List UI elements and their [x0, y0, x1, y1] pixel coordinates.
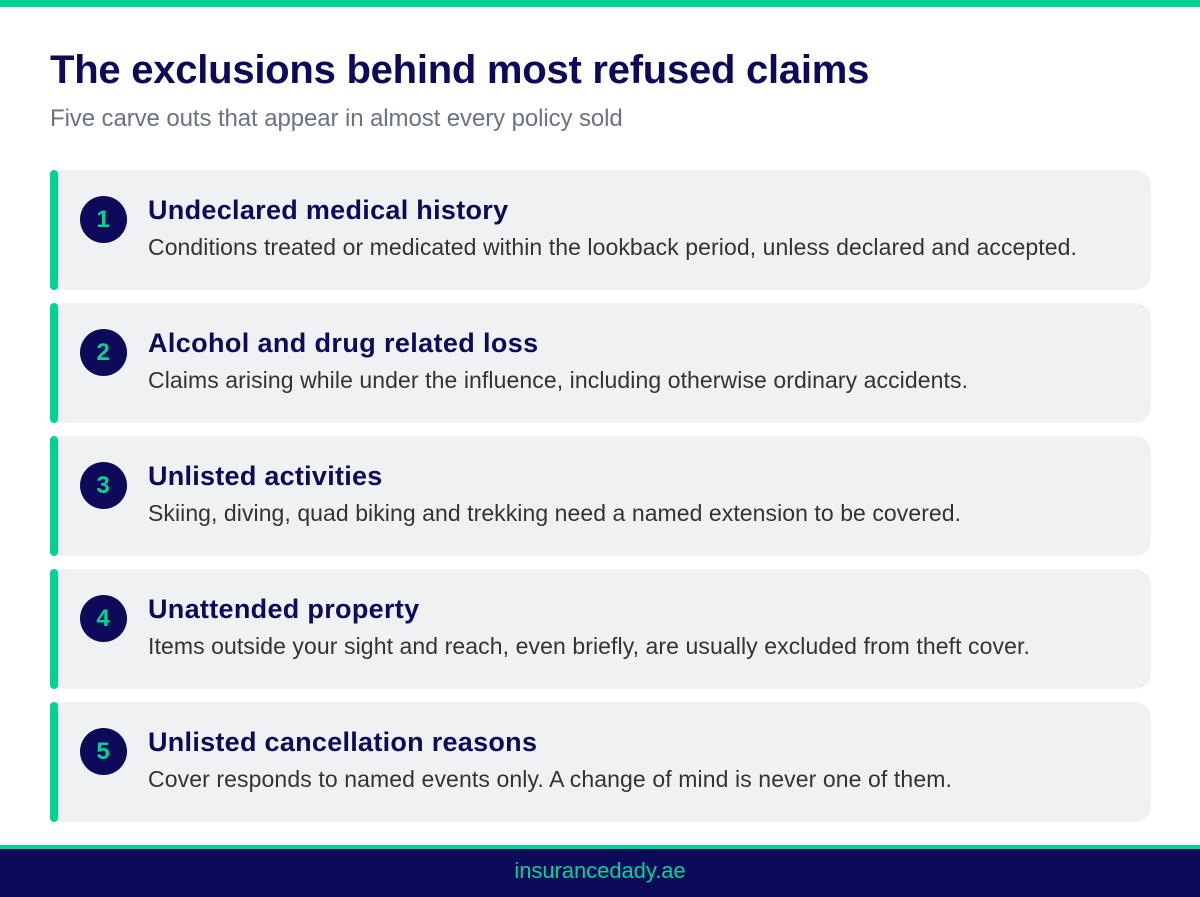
description 2: Claims arising while under the influence, including otherwise ordinary accidents.	[148, 367, 968, 393]
badge 1	[80, 196, 127, 243]
footer band	[0, 845, 1200, 897]
badge 1: 1	[96, 206, 110, 233]
heading 5: Unlisted cancellation reasons	[148, 727, 537, 757]
badge 5	[80, 728, 127, 775]
badge 4: 4	[96, 605, 110, 632]
heading 1: Undeclared medical history	[148, 195, 508, 225]
badge 3: 3	[96, 472, 110, 499]
heading 3: Unlisted activities	[148, 461, 383, 491]
heading 2: Alcohol and drug related loss	[148, 328, 539, 358]
badge 2	[80, 329, 127, 376]
badge 4	[80, 595, 127, 642]
description 5: Cover responds to named events only. A change of mind is never one of them.	[148, 766, 952, 792]
heading 4: Unattended property	[148, 594, 419, 624]
badge 2: 2	[96, 339, 110, 366]
title: The exclusions behind most refused claims	[50, 48, 869, 92]
description 3: Skiing, diving, quad biking and trekking need a named extension to be covered.	[148, 500, 961, 526]
top accent bar	[0, 0, 1200, 7]
panel: exclusion 5	[50, 702, 1151, 822]
footer website: insurancedady.ae	[514, 858, 686, 883]
panel: exclusion 1	[50, 170, 1151, 290]
badge 5: 5	[96, 738, 110, 765]
panel: exclusion 2	[50, 303, 1151, 423]
subtitle: Five carve outs that appear in almost every policy sold	[50, 105, 623, 132]
description 4: Items outside your sight and reach, even briefly, are usually excluded from theft cover.	[148, 633, 1030, 659]
panel: exclusion 4	[50, 569, 1151, 689]
panel: exclusion 3	[50, 436, 1151, 556]
description 1: Conditions treated or medicated within the lookback period, unless declared and accepted.	[148, 234, 1077, 260]
badge 3	[80, 462, 127, 509]
